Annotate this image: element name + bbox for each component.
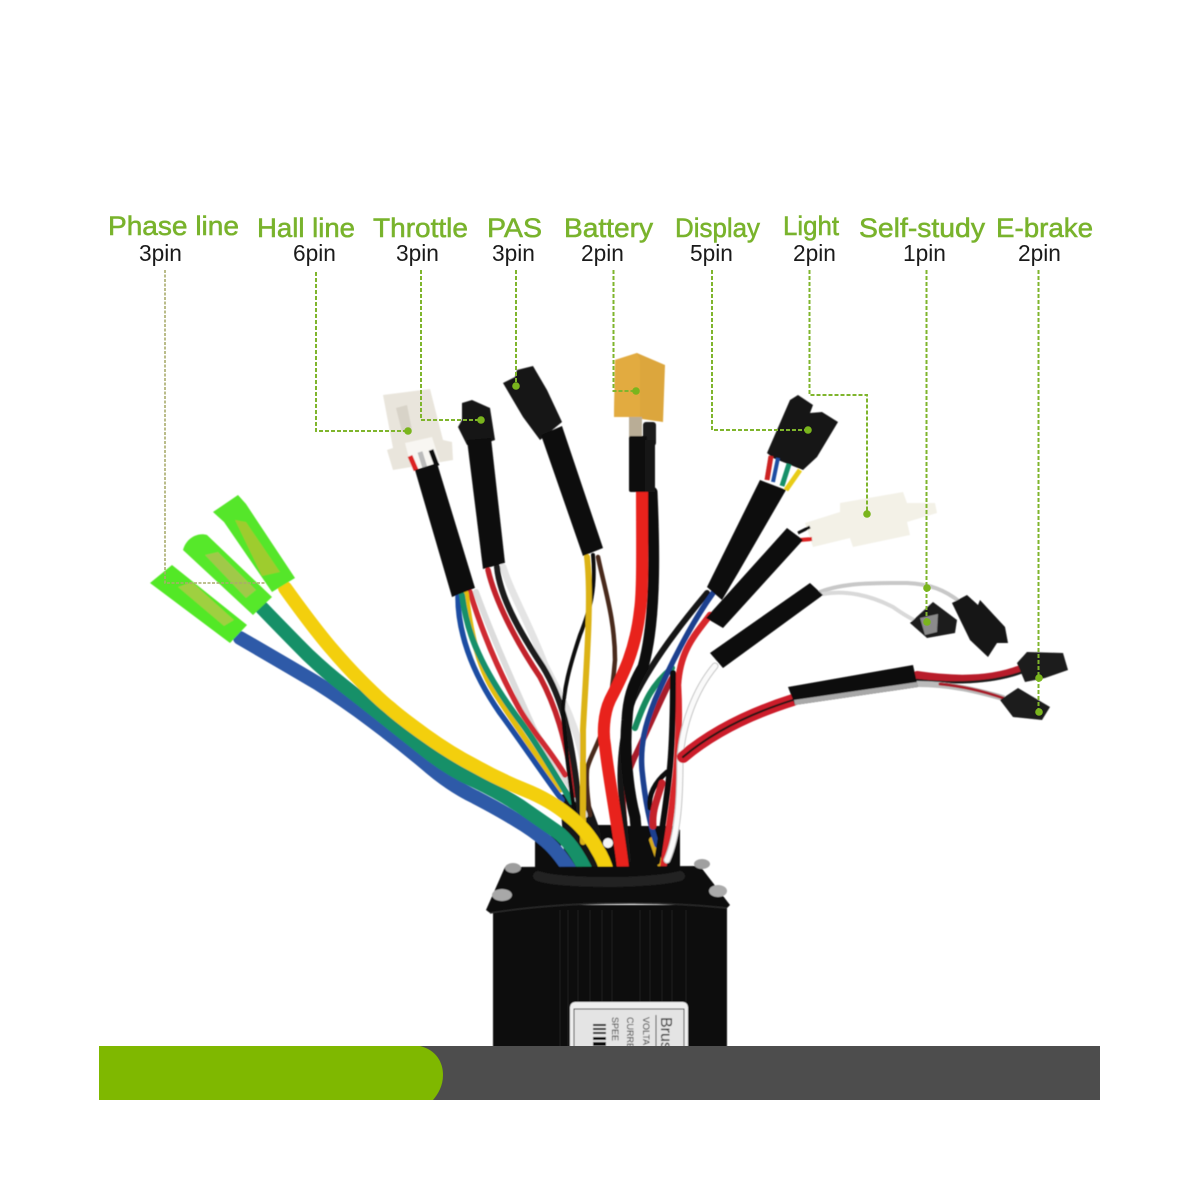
controller label sticker: Brus	[657, 1017, 674, 1050]
PAS sleeve	[541, 426, 603, 556]
label: phase line 3pin: Phase line	[108, 211, 239, 241]
self-study connector: large	[952, 595, 1008, 657]
label: throttle 3pin: 3pin	[396, 240, 439, 266]
controller label sticker: CURRE	[625, 1017, 635, 1049]
label: phase line 3pin: 3pin	[139, 240, 182, 266]
phase line wire: yellow	[285, 588, 607, 872]
e-brake connectors	[1000, 652, 1068, 720]
callout: hall line leader	[316, 272, 412, 435]
label: light 2pin: Light	[783, 211, 839, 241]
label: throttle 3pin: Throttle	[373, 213, 468, 243]
self-study connector: small	[910, 602, 957, 638]
label: self-study 1pin: Self-study	[859, 213, 986, 243]
callout: phase line leader	[165, 270, 265, 583]
label: PAS 3pin: 3pin	[492, 240, 535, 266]
display sleeve	[707, 480, 786, 600]
label: battery 2pin	[564, 213, 654, 266]
label: hall line 6pin: Hall line	[257, 213, 355, 243]
label: battery 2pin: Battery	[564, 213, 654, 243]
callout: e-brake leader	[1035, 270, 1043, 716]
label: PAS 3pin: PAS	[487, 213, 542, 243]
label: self-study 1pin	[859, 213, 986, 266]
callout: battery leader	[614, 270, 640, 395]
controller label sticker: SPEE	[610, 1017, 620, 1041]
thin wires: PAS line bundle	[563, 555, 615, 842]
hall line sleeve	[415, 463, 475, 597]
callout: light leader	[810, 270, 871, 518]
callout: self-study leader	[923, 270, 931, 626]
self-study wires	[820, 583, 960, 620]
light sleeve	[706, 528, 803, 628]
label: battery 2pin: 2pin	[581, 240, 624, 266]
light connector: white plug	[805, 492, 937, 547]
e-brake wires	[917, 668, 1023, 698]
label: display 5pin: 5pin	[690, 240, 733, 266]
product photo: controller and wiring harness	[150, 353, 1068, 1062]
throttle connector	[458, 400, 495, 445]
thin wires: throttle line bundle	[488, 567, 583, 815]
label: phase line 3pin	[108, 211, 239, 266]
controller label sticker	[570, 1002, 688, 1062]
wires: display, light and battery bundle	[604, 492, 713, 870]
wire: white self-study line	[667, 666, 715, 860]
phase line wire: blue	[240, 638, 574, 877]
label: hall line 6pin	[257, 213, 355, 266]
light wires	[798, 527, 812, 540]
callout: display leader	[712, 270, 812, 434]
PAS connector	[503, 366, 562, 440]
label: e-brake 2pin: E-brake	[996, 213, 1093, 243]
phase line connectors: green bullet caps	[150, 495, 295, 643]
label: throttle 3pin	[373, 213, 468, 266]
controller mounting bracket	[535, 825, 680, 876]
throttle sleeve	[467, 438, 505, 569]
label: PAS 3pin	[487, 213, 542, 266]
e-brake sleeve	[788, 665, 918, 705]
label: e-brake 2pin: 2pin	[1018, 240, 1061, 266]
label: self-study 1pin: 1pin	[903, 240, 946, 266]
label: light 2pin: 2pin	[793, 240, 836, 266]
dark wire mass at the left of the bundle	[560, 790, 605, 872]
phase line wire: green	[262, 608, 588, 875]
label: display 5pin	[675, 213, 760, 266]
label: display 5pin: Display	[675, 213, 760, 243]
controller body	[486, 859, 730, 1050]
hall line connector: white plug	[383, 389, 453, 470]
display connector	[767, 395, 838, 490]
label: e-brake 2pin	[996, 213, 1093, 266]
self-study sleeve	[710, 583, 823, 668]
footer bar	[99, 1046, 1100, 1100]
wire: red and black e-brake line	[683, 700, 793, 757]
battery connector: XT60 gold plug	[614, 353, 665, 492]
label: light 2pin	[783, 211, 839, 266]
thin wires: hall line bundle	[458, 592, 585, 815]
callout: PAS leader	[512, 270, 520, 390]
controller label sticker: VOLTA	[641, 1017, 651, 1045]
label: hall line 6pin: 6pin	[293, 240, 336, 266]
callout: throttle leader	[421, 270, 485, 424]
